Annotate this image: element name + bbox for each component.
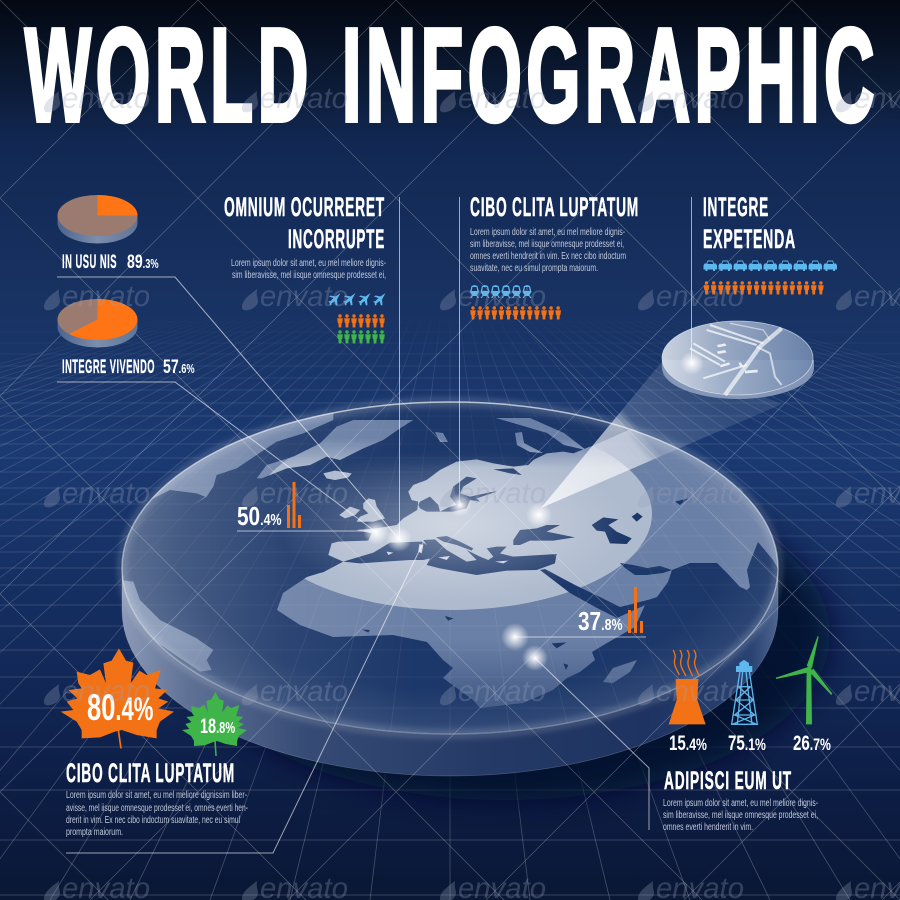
icons: green people xyxy=(337,330,385,344)
label: integre vivendo 57.6% xyxy=(62,356,195,378)
label: in usu nis 89.3%: IN USU NIS xyxy=(62,252,117,273)
city blocks xyxy=(717,343,758,373)
panel: integre expetenda xyxy=(703,192,837,294)
green maple leaf 18.8%: 18.8% xyxy=(200,714,235,738)
body text: avisse, mel iisque omnesque prodesset ei, omnes everti hen- xyxy=(66,803,248,814)
body text: Lorem ipsum dolor sit amet, eu mel meliore dignis- xyxy=(663,798,818,809)
icons: trains xyxy=(470,285,532,298)
callout: 50.4% bars: 50.4% xyxy=(237,502,282,531)
body text: omnes everti hendrerit in vim. Ex nec cibo indoctum xyxy=(470,251,626,262)
heading xyxy=(703,192,796,254)
watermark logos: envato xyxy=(656,280,744,313)
disc rim highlight xyxy=(122,402,778,734)
orange maple leaf 80.4%: 80.4% xyxy=(87,686,153,728)
orange maple leaf 80.4% xyxy=(61,648,174,748)
watermark logos: envato xyxy=(62,675,150,708)
watermark logos: envato xyxy=(458,280,546,313)
heading: INCORRUPTE xyxy=(288,224,385,254)
body text xyxy=(231,258,386,281)
body text: Lorem ipsum dolor sit amet, eu mel meliore dignis- xyxy=(231,258,386,269)
watermark logos: envato xyxy=(656,675,744,708)
heading: EXPETENDA xyxy=(703,224,796,254)
icons: planes xyxy=(328,293,386,306)
callout: 50.4% bars xyxy=(237,482,376,531)
label: in usu nis 89.3%: 89.3% xyxy=(127,251,159,273)
globe disc with world map xyxy=(116,396,785,776)
body text: sim liberavisse, mel iisque omnesque prodesset ei, xyxy=(232,270,386,281)
watermark logos: envato xyxy=(458,477,546,510)
body text: prompta maiorum. xyxy=(66,827,123,838)
stats: energy percentages: 26.7% xyxy=(793,730,831,755)
icons: orange people xyxy=(704,281,824,294)
stats: energy percentages: 75.1% xyxy=(728,730,766,755)
body text: Lorem ipsum dolor sit amet, eu mel meliore dignissim liber- xyxy=(66,790,247,801)
heading: INTEGRE xyxy=(703,192,769,222)
icons: orange people xyxy=(470,306,561,320)
watermark logos: envato xyxy=(656,477,744,510)
heading: CIBO CLITA LUPTATUM xyxy=(470,192,639,222)
city map roads xyxy=(690,323,782,395)
watermark logos: envato xyxy=(458,675,546,708)
body text: suavitate, nec eu simul prompta maiorum. xyxy=(470,263,598,274)
body text: Lorem ipsum dolor sit amet, eu mel meliore dignis- xyxy=(470,227,625,238)
bright central lens map xyxy=(269,442,652,610)
watermark logos: envato xyxy=(458,82,546,115)
watermark logos: envato xyxy=(260,675,348,708)
glowing location points xyxy=(363,351,704,671)
body text: drerit in vim. Ex nec cibo indoctum suavitate, nec eu simul xyxy=(66,815,240,826)
watermark logos: envato xyxy=(260,477,348,510)
pie chart: integre vivendo xyxy=(58,299,138,347)
label: integre vivendo 57.6%: 57.6% xyxy=(163,356,195,378)
body text xyxy=(663,798,818,833)
body text: sim liberavisse, mel iisque omnesque prodesset ei, xyxy=(663,810,818,821)
body text: omnes everti hendrerit in vim. xyxy=(663,822,753,833)
stats: energy percentages xyxy=(669,730,831,755)
watermark logos: envato xyxy=(62,82,150,115)
disc rim glow xyxy=(120,400,780,736)
title: WORLD xyxy=(25,2,313,148)
pie chart: in usu nis xyxy=(58,195,138,243)
city lens disc xyxy=(662,321,814,399)
panel: omnium ocurreret xyxy=(224,192,386,344)
body text xyxy=(66,790,248,838)
world map land xyxy=(120,407,790,740)
watermark logos: envato xyxy=(62,280,150,313)
disc top face xyxy=(122,402,778,734)
watermark logos: envato xyxy=(260,82,348,115)
connector lines xyxy=(57,197,692,853)
heading xyxy=(224,192,385,254)
watermark logos: envato xyxy=(62,477,150,510)
watermark logos: envato xyxy=(656,82,744,115)
icons: orange people xyxy=(337,314,385,328)
heading: CIBO CLITA LUPTATUM xyxy=(66,758,235,788)
icon: oil rig xyxy=(732,661,757,724)
heading: OMNIUM OCURRERET xyxy=(224,192,385,222)
icon: wind turbine xyxy=(776,636,832,724)
heading: ADIPISCI EUM UT xyxy=(664,767,792,795)
body text xyxy=(470,227,626,274)
icon: cooling tower with smoke xyxy=(669,650,706,724)
glass lighting xyxy=(122,402,778,734)
perspective floor grid xyxy=(0,240,900,900)
icons: cars xyxy=(704,260,837,271)
stats: energy percentages: 15.4% xyxy=(669,730,707,755)
callout: 37.8% bars: 37.8% xyxy=(578,607,623,636)
callout: 37.8% bars xyxy=(515,587,646,637)
disc side wall xyxy=(122,568,778,776)
panel: cibo clita luptatum top xyxy=(470,192,639,320)
panel: adipisci eum ut xyxy=(663,767,818,833)
title xyxy=(25,2,879,148)
green maple leaf 18.8% xyxy=(182,692,247,756)
watermark logos: envato xyxy=(260,280,348,313)
label: integre vivendo 57.6%: INTEGRE VIVENDO xyxy=(62,357,155,378)
panel: cibo clita luptatum bottom xyxy=(66,758,248,838)
disc shadow xyxy=(180,470,830,800)
body text: sim liberavisse, mel iisque omnesque prodesset ei, xyxy=(470,239,624,250)
light beam to city disc xyxy=(541,358,782,508)
